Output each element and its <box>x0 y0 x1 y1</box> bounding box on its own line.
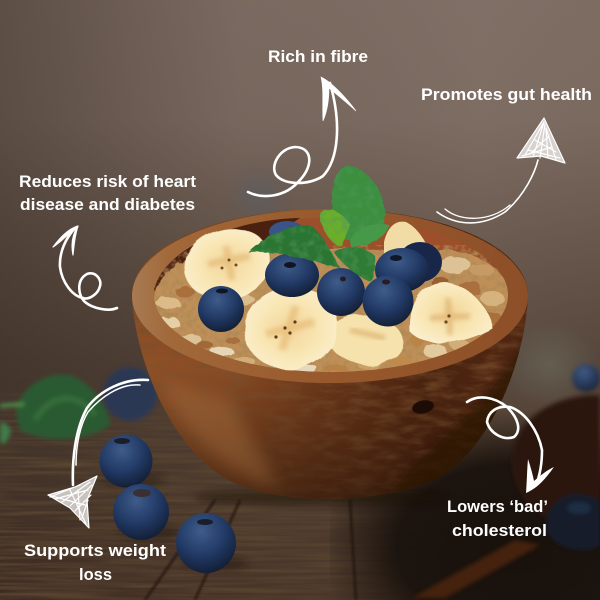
label: Lowers bad cholesterol <box>447 497 548 540</box>
oats <box>154 245 508 372</box>
label: Reduces risk of heart disease and diabetes: disease and diabetes <box>20 195 195 214</box>
banana slice left <box>177 219 279 309</box>
banana slice front <box>238 279 344 377</box>
bowl shadow <box>195 489 445 505</box>
mint sprig <box>248 166 390 281</box>
banana slice centre <box>325 310 407 370</box>
label: Supports weight loss: Supports weight <box>24 541 166 560</box>
label: Lowers bad cholesterol: cholesterol <box>452 521 547 540</box>
blurred spinach leaf <box>0 375 110 444</box>
arrow: to Reduces risk <box>53 226 117 310</box>
label: Promotes gut health: Promotes gut health <box>421 85 592 104</box>
blueberries on the table <box>100 364 600 573</box>
banana slice right <box>410 282 492 343</box>
rim <box>132 209 528 383</box>
blueberries in bowl <box>198 286 244 332</box>
rear blueberry and banana <box>269 221 305 243</box>
label: Reduces risk of heart disease and diabetes: Reduces risk of heart <box>19 172 196 191</box>
wooden bowl with oats <box>130 205 530 505</box>
label: Supports weight loss <box>24 541 166 584</box>
arrow: to Rich in fibre <box>248 77 356 196</box>
wooden spoon <box>412 395 600 598</box>
arrow: to Supports weight loss <box>48 380 148 528</box>
label: Reduces risk of heart disease and diabetes <box>19 172 196 214</box>
label: Supports weight loss: loss <box>79 565 112 584</box>
arrow: to Lowers bad cholesterol <box>467 397 554 493</box>
label: Lowers bad cholesterol: Lowers ‘bad’ <box>447 497 548 516</box>
oat flakes <box>156 257 504 374</box>
bowl body <box>132 209 528 499</box>
label: Rich in fibre: Rich in fibre <box>268 47 368 66</box>
arrow: to Promotes gut health <box>437 118 565 223</box>
bowl interior <box>154 218 508 372</box>
banana slices and blueberries <box>177 219 492 377</box>
